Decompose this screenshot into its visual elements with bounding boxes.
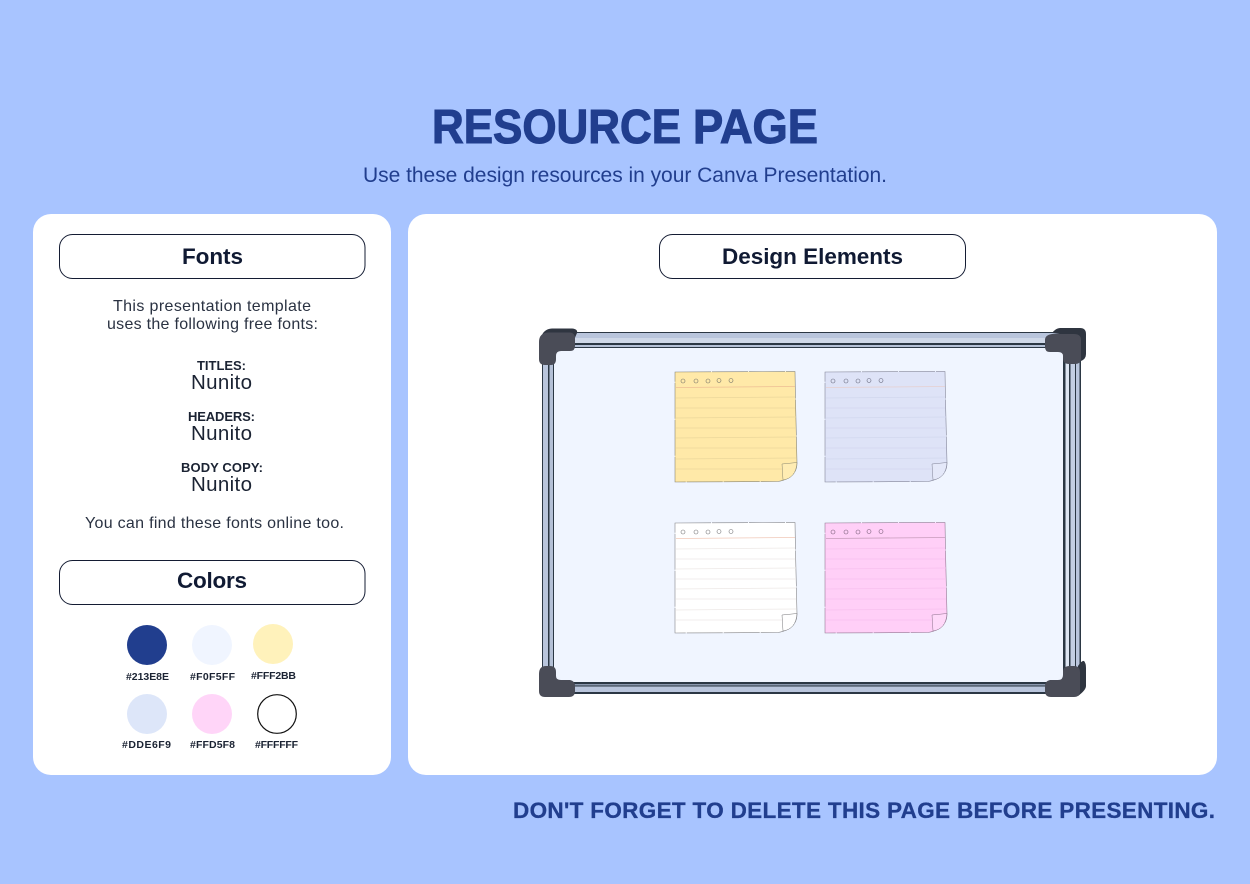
- text: titles font: Nunito: [191, 371, 252, 394]
- swatch: 213E8E: [126, 625, 169, 683]
- swatch: FFD5F8: #FFD5F8: [190, 739, 235, 751]
- swatch: DDE6F9: #DDE6F9: [122, 739, 171, 751]
- panel: fonts and colors: [33, 214, 391, 775]
- frame: top bar: [560, 332, 1060, 348]
- frame: bottom bar: [560, 682, 1060, 694]
- swatch: FFF2BB: [251, 624, 296, 682]
- text: headers font: Nunito: [191, 422, 252, 445]
- text: titles font: TITLES:: [197, 358, 246, 373]
- board surface: [553, 347, 1065, 683]
- sticky note: yellow: [675, 372, 797, 482]
- text: body copy font: BODY COPY:: [181, 460, 263, 475]
- sticky note: white: [675, 522, 797, 633]
- text: headers font: [188, 409, 255, 445]
- title: PAGE: [693, 101, 818, 154]
- swatch: F0F5FF: [190, 625, 236, 683]
- heading: design elements: [660, 234, 966, 278]
- sticky note: pink: [825, 522, 947, 633]
- corner: bottom right: [1045, 661, 1086, 697]
- frame: left bar: [542, 350, 554, 680]
- heading: design elements: Design Elements: [722, 244, 903, 269]
- heading: colors: Colors: [177, 568, 247, 593]
- corner: bottom left: [539, 666, 575, 697]
- text: fonts intro: uses the following free fonts:: [107, 316, 318, 333]
- text: headers font: HEADERS:: [188, 409, 255, 424]
- corner: top right: [1045, 328, 1086, 364]
- title: RESOURCE: [432, 101, 681, 154]
- swatch: FFFFFF: #FFFFFF: [255, 739, 299, 751]
- heading: fonts: [60, 234, 365, 278]
- text: body copy font: [181, 460, 263, 496]
- text: fonts intro: This presentation template: [113, 298, 311, 315]
- swatch: FFFFFF: [255, 695, 299, 751]
- swatch: DDE6F9: [122, 694, 171, 751]
- sticky note: periwinkle: [825, 372, 947, 482]
- swatch: FFD5F8: [190, 694, 235, 751]
- subtitle: Use these design resources in your Canva Presentation.: [363, 164, 887, 187]
- text: body copy font: Nunito: [191, 473, 252, 496]
- text: fonts intro: [107, 298, 318, 333]
- footer reminder: DON'T FORGET TO DELETE THIS PAGE BEFORE PRESENTING.: [513, 798, 1215, 823]
- whiteboard: [539, 328, 1086, 697]
- swatch: 213E8E: #213E8E: [126, 671, 169, 683]
- heading: colors: [60, 560, 365, 604]
- panel: design elements: [408, 214, 1217, 775]
- heading: fonts: Fonts: [182, 244, 243, 269]
- corner: top left: [539, 328, 577, 365]
- frame: right bar: [1063, 350, 1081, 675]
- swatch: F0F5FF: #F0F5FF: [190, 671, 236, 683]
- text: fonts note: You can find these fonts online too.: [85, 515, 344, 532]
- swatch: FFF2BB: #FFF2BB: [251, 670, 296, 682]
- text: titles font: [191, 358, 252, 394]
